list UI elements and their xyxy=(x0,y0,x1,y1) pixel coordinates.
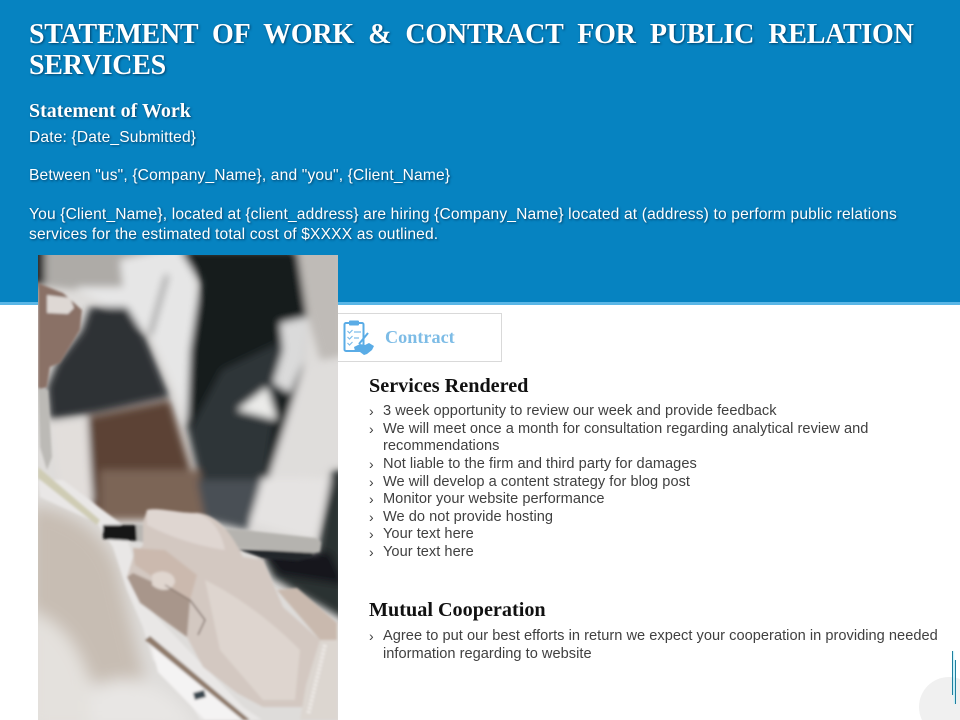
services list: › xyxy=(369,421,374,437)
shirt highlights xyxy=(273,317,307,393)
corner accent lines xyxy=(952,650,956,704)
services list: › xyxy=(369,456,374,472)
cooperation text xyxy=(369,628,938,662)
tab label: Contract xyxy=(385,327,455,347)
services list: › xyxy=(369,491,374,507)
cooperation text: › xyxy=(369,628,374,644)
engagement paragraph xyxy=(29,206,898,242)
services list: 3 week opportunity to review our week and provide feedback xyxy=(383,403,777,419)
title xyxy=(29,19,916,81)
lower background tones xyxy=(197,480,262,530)
services list: We do not provide hosting xyxy=(383,509,553,525)
services list: › xyxy=(369,403,374,419)
cooperation text: information regarding to website xyxy=(383,646,592,662)
header band xyxy=(0,0,960,305)
contract tab xyxy=(338,313,502,362)
subheading: statement of work: Statement of Work xyxy=(29,100,191,122)
services list xyxy=(369,403,868,560)
photo: hand holding a pen over a clipboard xyxy=(38,255,338,720)
title: STATEMENT OF WORK & CONTRACT FOR PUBLIC RELATION xyxy=(29,19,914,50)
pen xyxy=(103,525,137,541)
engagement paragraph: services for the estimated total cost of $XXXX as outlined. xyxy=(29,226,438,242)
services list: › xyxy=(369,474,374,490)
services list: › xyxy=(369,544,374,560)
services list: recommendations xyxy=(383,438,499,454)
dark jacket left xyxy=(47,307,170,420)
foreground blurred arm xyxy=(30,505,200,720)
services list: We will develop a content strategy for blog post xyxy=(383,474,690,490)
icon: clipboard with handshake xyxy=(344,320,374,355)
services list: Your text here xyxy=(383,526,474,542)
corner circle xyxy=(919,677,960,720)
second hand behind xyxy=(277,588,337,640)
services list: Your text here xyxy=(383,544,474,560)
title: SERVICES xyxy=(29,50,166,81)
collar xyxy=(75,250,197,430)
left light block xyxy=(50,420,93,500)
heading: services rendered: Services Rendered xyxy=(369,375,528,397)
dark jacket centre xyxy=(180,250,307,495)
left fingers xyxy=(38,283,82,390)
clipboard paper xyxy=(38,480,262,720)
services list: Monitor your website performance xyxy=(383,491,605,507)
parties line: Between "us", {Company_Name}, and "you", {Client_Name} xyxy=(29,167,450,184)
services list: › xyxy=(369,509,374,525)
date line: Date: {Date_Submitted} xyxy=(29,129,196,146)
services list: Not liable to the firm and third party for damages xyxy=(383,456,697,472)
engagement paragraph: You {Client_Name}, located at {client_address} are hiring {Company_Name} located at (address) to perform public relations xyxy=(29,206,897,223)
hand xyxy=(127,509,320,707)
right background xyxy=(292,245,345,360)
cooperation text: Agree to put our best efforts in return we expect your cooperation in providing needed xyxy=(383,628,938,644)
background upper left xyxy=(30,245,170,290)
brown table xyxy=(88,400,205,520)
cuff xyxy=(300,640,338,720)
heading: mutual cooperation: Mutual Cooperation xyxy=(369,599,546,621)
services list: › xyxy=(369,526,374,542)
services list: We will meet once a month for consultation regarding analytical review and xyxy=(383,421,868,437)
left pen xyxy=(38,388,52,470)
